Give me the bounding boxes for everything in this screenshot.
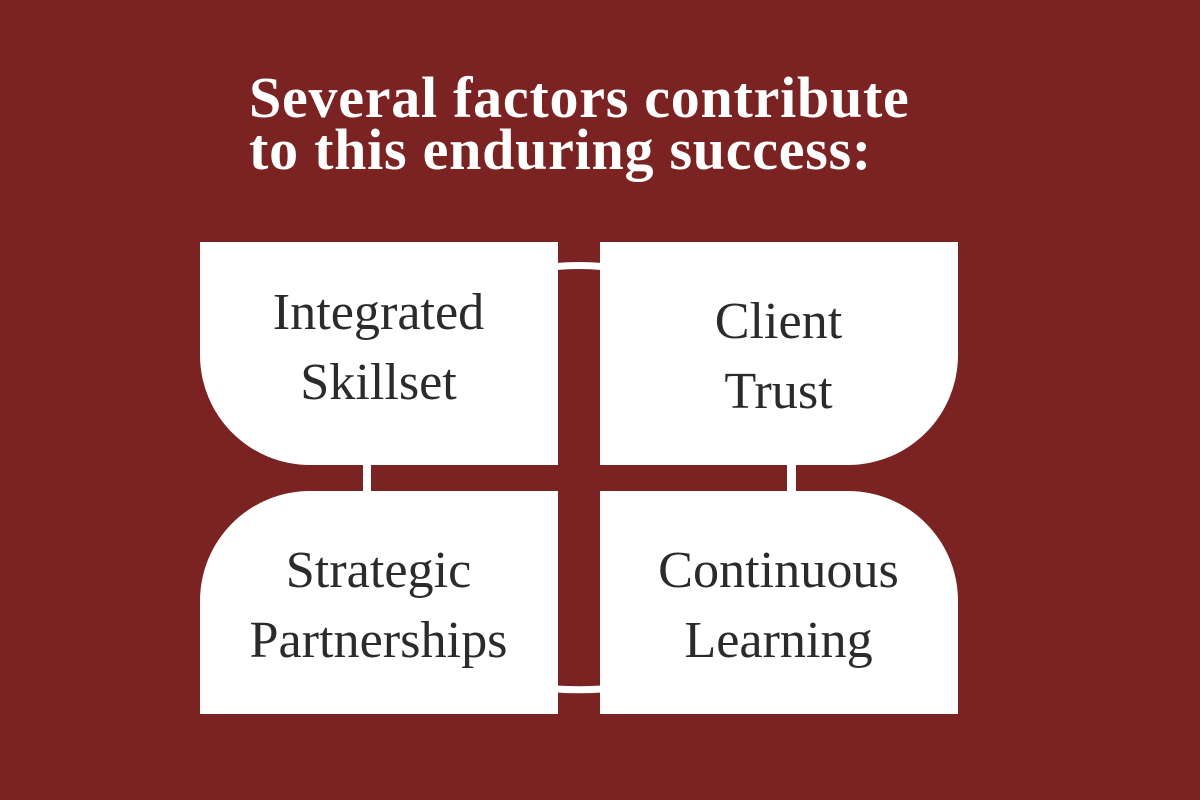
- connector: bottom arc: [556, 686, 602, 693]
- title: Several factors contribute: [249, 65, 910, 130]
- panel: Integrated Skillset: Integrated: [273, 283, 484, 341]
- panel: Strategic Partnerships: Partnerships: [249, 611, 508, 669]
- panel: Continuous Learning: Continuous: [658, 541, 899, 599]
- connector: left vertical: [363, 463, 371, 493]
- panel: Continuous Learning: Learning: [684, 611, 873, 669]
- connector: right vertical: [787, 463, 796, 493]
- panel: Continuous Learning: [600, 491, 958, 714]
- panel: Client Trust: [600, 242, 958, 465]
- panel: Strategic Partnerships: [200, 491, 558, 714]
- panel: Integrated Skillset: [200, 242, 558, 465]
- panel: Strategic Partnerships: Strategic: [286, 541, 471, 599]
- panel: Integrated Skillset: Skillset: [300, 353, 457, 411]
- connector: top arc: [556, 266, 602, 267]
- panel: Client Trust: Trust: [724, 362, 833, 420]
- panel: Client Trust: Client: [715, 292, 843, 350]
- title: to this enduring success:: [249, 117, 872, 182]
